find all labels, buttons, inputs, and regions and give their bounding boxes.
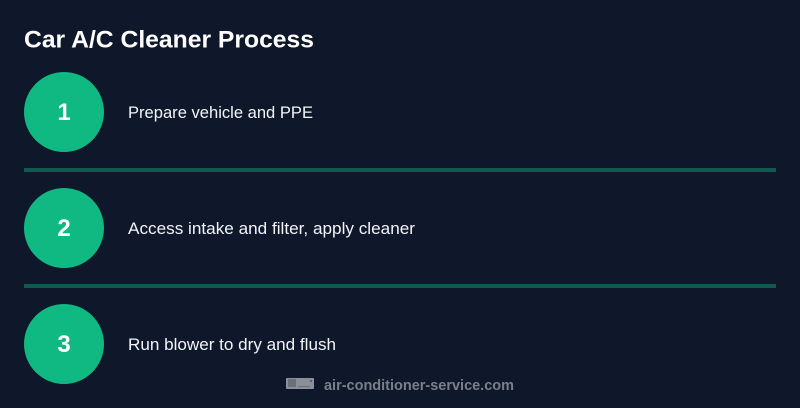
step 2 number badge: 2: [57, 215, 71, 242]
step 3 number badge: [24, 304, 104, 384]
icon: air conditioner unit: [286, 378, 314, 389]
step 3 label: Run blower to dry and flush: [128, 336, 336, 354]
footer site name: air-conditioner-service.com: [324, 378, 514, 394]
step 2: [24, 188, 416, 268]
title: Car A/C Cleaner Process: [24, 26, 314, 53]
step 3: [24, 304, 336, 384]
step 1 number badge: [24, 72, 104, 152]
step 2 label: Access intake and filter, apply cleaner: [128, 220, 416, 238]
step 2 number badge: [24, 188, 104, 268]
step 1: [24, 72, 313, 152]
step 3 number badge: 3: [57, 331, 71, 358]
step 1 label: Prepare vehicle and PPE: [128, 104, 313, 122]
footer watermark: [286, 378, 514, 394]
step 1 number badge: 1: [57, 99, 71, 126]
